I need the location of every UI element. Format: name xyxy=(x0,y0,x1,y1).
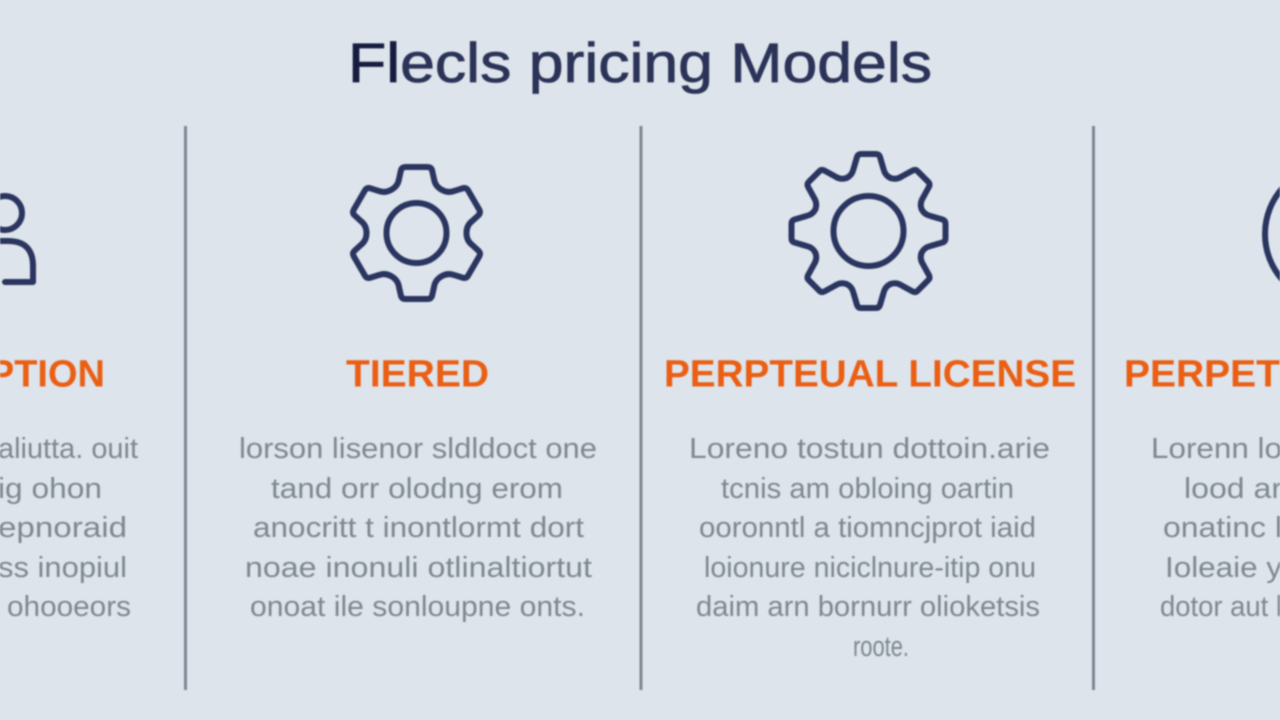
body text: perpetual license: daim arn bornurr olioketsis xyxy=(696,591,1040,623)
icon: circle (cropped) xyxy=(1265,165,1280,303)
icon: eight-tooth gear xyxy=(792,154,946,308)
body text: subscription: ig ohon xyxy=(0,473,102,505)
panel: tiered xyxy=(239,167,597,623)
body text: tiered: anocritt t inontlormt dort xyxy=(253,512,584,544)
heading: perpetual license: PERPTEUAL LICENSE xyxy=(664,354,1076,396)
body text: perpetual: lood ar xyxy=(1184,473,1280,505)
heading: tiered: TIERED xyxy=(346,354,489,396)
body text: subscription: epnoraid xyxy=(0,512,127,544)
body text: tiered: lorson lisenor sldldoct one xyxy=(239,433,597,465)
body text: subscription xyxy=(0,433,138,623)
body text: tiered: tand orr olodng erom xyxy=(271,473,563,505)
body text: perpetual: onatinc l xyxy=(1163,512,1280,544)
body text: tiered xyxy=(239,433,597,623)
panel: perpetual (cropped) xyxy=(1124,165,1280,623)
body text: perpetual license: loionure niciclnure-itip onu xyxy=(704,552,1036,584)
icon: six-tooth gear xyxy=(347,167,486,299)
panel: perpetual license xyxy=(664,154,1076,663)
body text: perpetual license: ooronntl a tiomncjprot iaid xyxy=(699,512,1036,544)
body text: tiered: noae inonuli otlinaltiortut xyxy=(245,552,592,584)
body text: perpetual: Lorenn lo xyxy=(1151,433,1280,465)
body text: perpetual xyxy=(1151,433,1280,623)
title: Flecls pricing Models xyxy=(348,31,932,94)
body text: perpetual license: tcnis am obloing oartin xyxy=(721,473,1014,505)
icon: person xyxy=(0,196,33,282)
body text: subscription: ohooeors xyxy=(7,591,131,623)
body text: subscription: aliutta. ouit xyxy=(0,433,138,465)
panel: subscription (cropped) xyxy=(0,196,138,623)
body text: perpetual license: roote. xyxy=(853,631,909,663)
body text: perpetual: Ioleaie y xyxy=(1165,552,1280,584)
body text: perpetual license: Loreno tostun dottoin.arie xyxy=(689,433,1050,465)
heading: perpetual: PERPET xyxy=(1124,354,1280,396)
body text: perpetual license xyxy=(689,433,1050,663)
body text: tiered: onoat ile sonloupne onts. xyxy=(250,591,585,623)
body text: subscription: ss inopiul xyxy=(0,552,127,584)
